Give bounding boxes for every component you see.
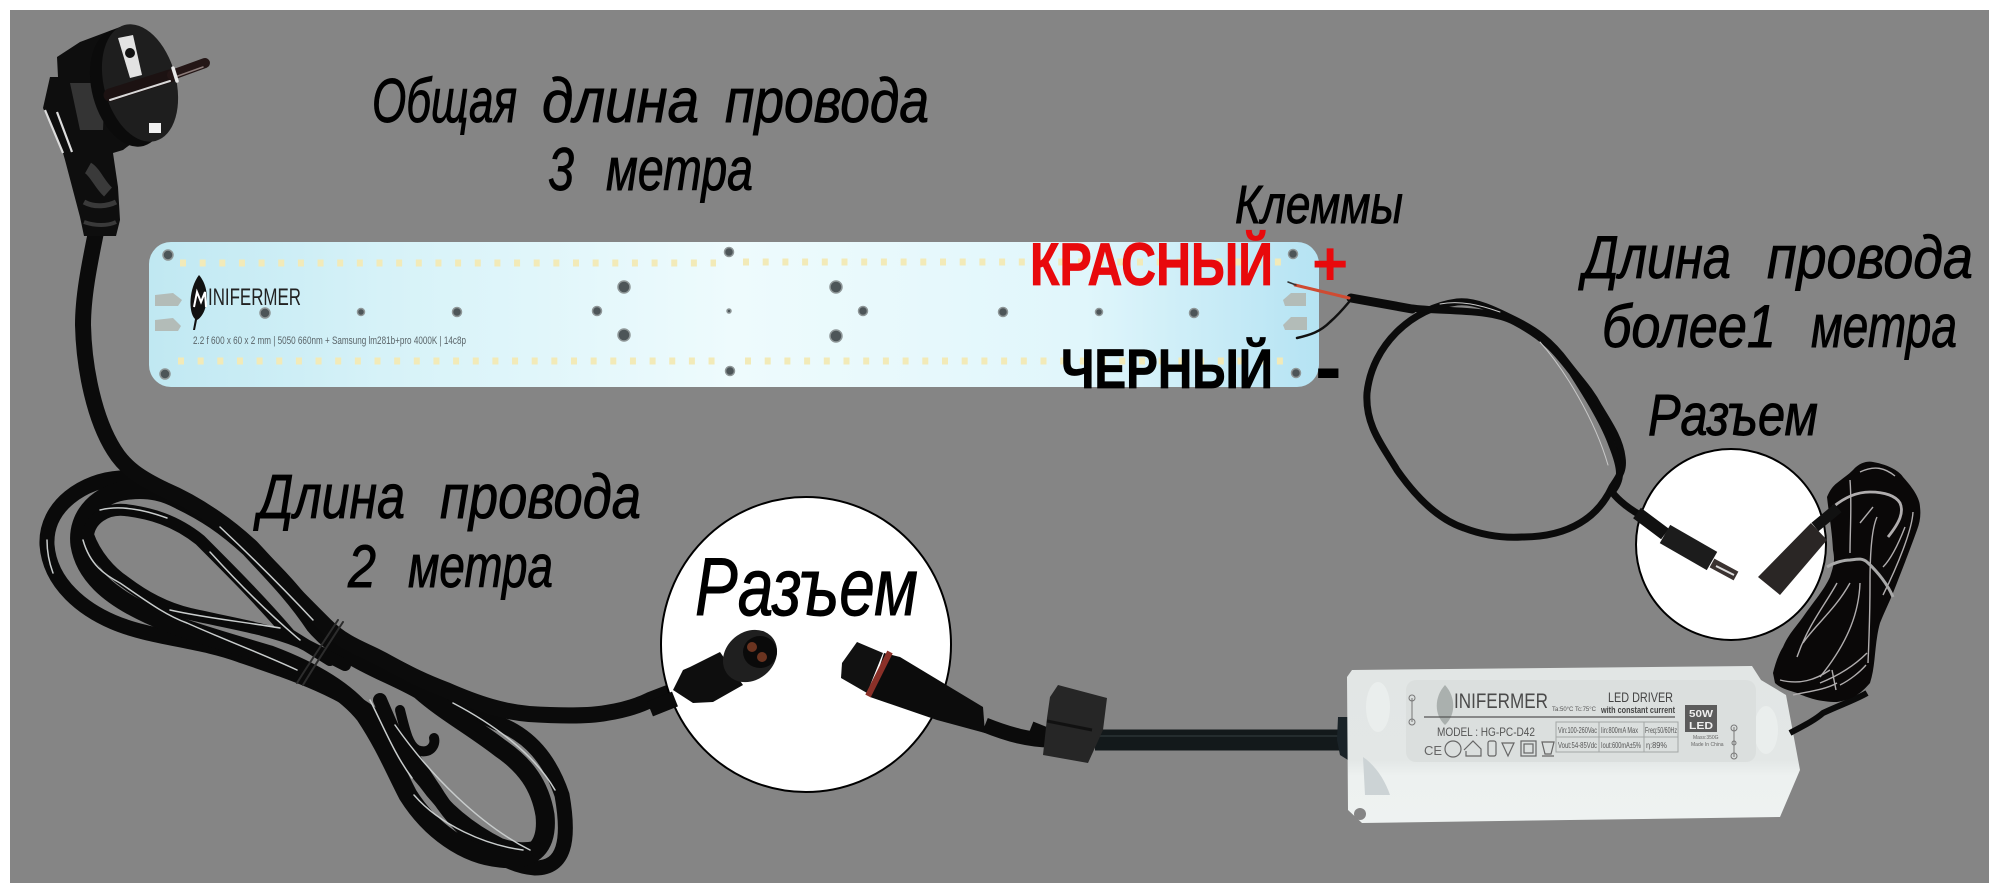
specification table: Vin:100-260Vac: [1558, 726, 1597, 735]
label: wire length over 1 m: провода: [1767, 224, 1973, 291]
small connector callout circle: [1636, 449, 1838, 640]
label: wire length 2 m: метра: [408, 533, 553, 600]
specification table: Freq:50/60Hz: [1645, 726, 1677, 735]
cable tie: [297, 620, 343, 685]
board logo: [190, 275, 301, 330]
specification table: Iin:800mA Max: [1601, 726, 1638, 735]
label: wire length over 1 m: метра: [1811, 293, 1957, 360]
cable highlights: [47, 508, 555, 850]
coil highlights: [1780, 468, 1913, 695]
cable to driver with gland: [985, 685, 1348, 763]
specification table: Iout:600mA±5%: [1601, 741, 1641, 750]
cable end at connector: [650, 699, 675, 709]
specification table: η:89%: [1646, 741, 1667, 750]
power plug: [43, 16, 205, 236]
output wire from driver to coil: [1790, 693, 1867, 733]
driver input and output markers: [1409, 695, 1737, 759]
temperature rating: Ta:50°C Tc:75°C: [1552, 707, 1597, 713]
red lead: [1295, 285, 1349, 298]
certification icons: CE: [1424, 743, 1442, 758]
driver subtitle: with constant current: [1600, 705, 1675, 715]
plug pin: [110, 63, 205, 100]
black lead: [1297, 302, 1349, 338]
certification icons: [1424, 741, 1554, 758]
wattage badge: 50W: [1689, 709, 1714, 720]
wattage badge: LED: [1689, 721, 1713, 732]
red polarity label: +: [1312, 230, 1348, 299]
coil tie: [1827, 559, 1893, 597]
manufacture note: Made In China: [1691, 742, 1724, 748]
board logo: INIFERMER: [208, 284, 301, 311]
wattage badge: [1685, 705, 1717, 732]
label: wire length over 1 m: Длина: [1578, 224, 1731, 291]
manufacture note: [1691, 735, 1724, 748]
heading: total wire length: метра: [606, 136, 753, 203]
LED strip board: [149, 242, 1319, 387]
board specification text: 2.2 f 600 x 60 x 2 mm | 5050 660nm + Samsung lm281b+pro 4000K | 14c8p: [193, 335, 466, 347]
driver divider: [1424, 716, 1675, 718]
label: wire length 2 m: [253, 463, 641, 600]
small connector label: Разъем: [1648, 383, 1818, 448]
connector callout circle: [650, 497, 985, 792]
heading: total wire length: длина: [542, 67, 699, 136]
label: wire length 2 m: провода: [440, 463, 641, 532]
specification table: [1556, 722, 1678, 752]
specification table: Vout:54-85Vdc: [1558, 741, 1597, 750]
DC plug male: [1637, 513, 1736, 576]
driver logo: [1437, 685, 1548, 725]
label: wire length 2 m: 2: [347, 533, 376, 600]
terminals label: Клеммы: [1235, 175, 1403, 235]
black polarity label: -: [1315, 322, 1342, 411]
label: wire length over 1 m: [1578, 224, 1973, 360]
driver label panel: [1406, 680, 1756, 762]
strain relief: [84, 168, 116, 225]
mains cable with coil: [47, 232, 676, 868]
driver logo: INIFERMER: [1454, 690, 1548, 713]
red polarity label: КРАСНЫЙ: [1030, 231, 1273, 298]
mounting holes: [160, 248, 1300, 379]
DC socket female: [1758, 508, 1838, 595]
black polarity label: [1061, 322, 1342, 411]
thin wire loop from board: [1288, 282, 1644, 537]
bracket stripes: [45, 110, 72, 153]
waterproof connector male: [841, 642, 985, 733]
cable gland nut: [1043, 685, 1107, 763]
driver end mouldings: [1354, 682, 1778, 820]
waterproof connector female: [673, 619, 788, 703]
plug face: [90, 16, 190, 150]
model text: MODEL : HG-PC-D42: [1437, 725, 1535, 739]
connector label: Разъем: [695, 542, 918, 633]
heading: total wire length: провода: [725, 67, 929, 136]
LED driver: [1347, 666, 1800, 823]
manufacture note: Mass:350G: [1693, 735, 1719, 741]
label: wire length 2 m: Длина: [253, 463, 405, 532]
black polarity label: ЧЕРНЫЙ: [1061, 337, 1273, 400]
heading: total wire length: [372, 67, 929, 203]
terminal clips: [155, 293, 1307, 331]
heading: total wire length: Общая: [372, 67, 517, 136]
LED rows: [178, 262, 1284, 361]
driver title: LED DRIVER: [1608, 689, 1673, 705]
coiled output cable: [1773, 462, 1920, 702]
label: wire length over 1 m: более1: [1602, 293, 1776, 360]
heading: total wire length: 3: [548, 136, 574, 203]
